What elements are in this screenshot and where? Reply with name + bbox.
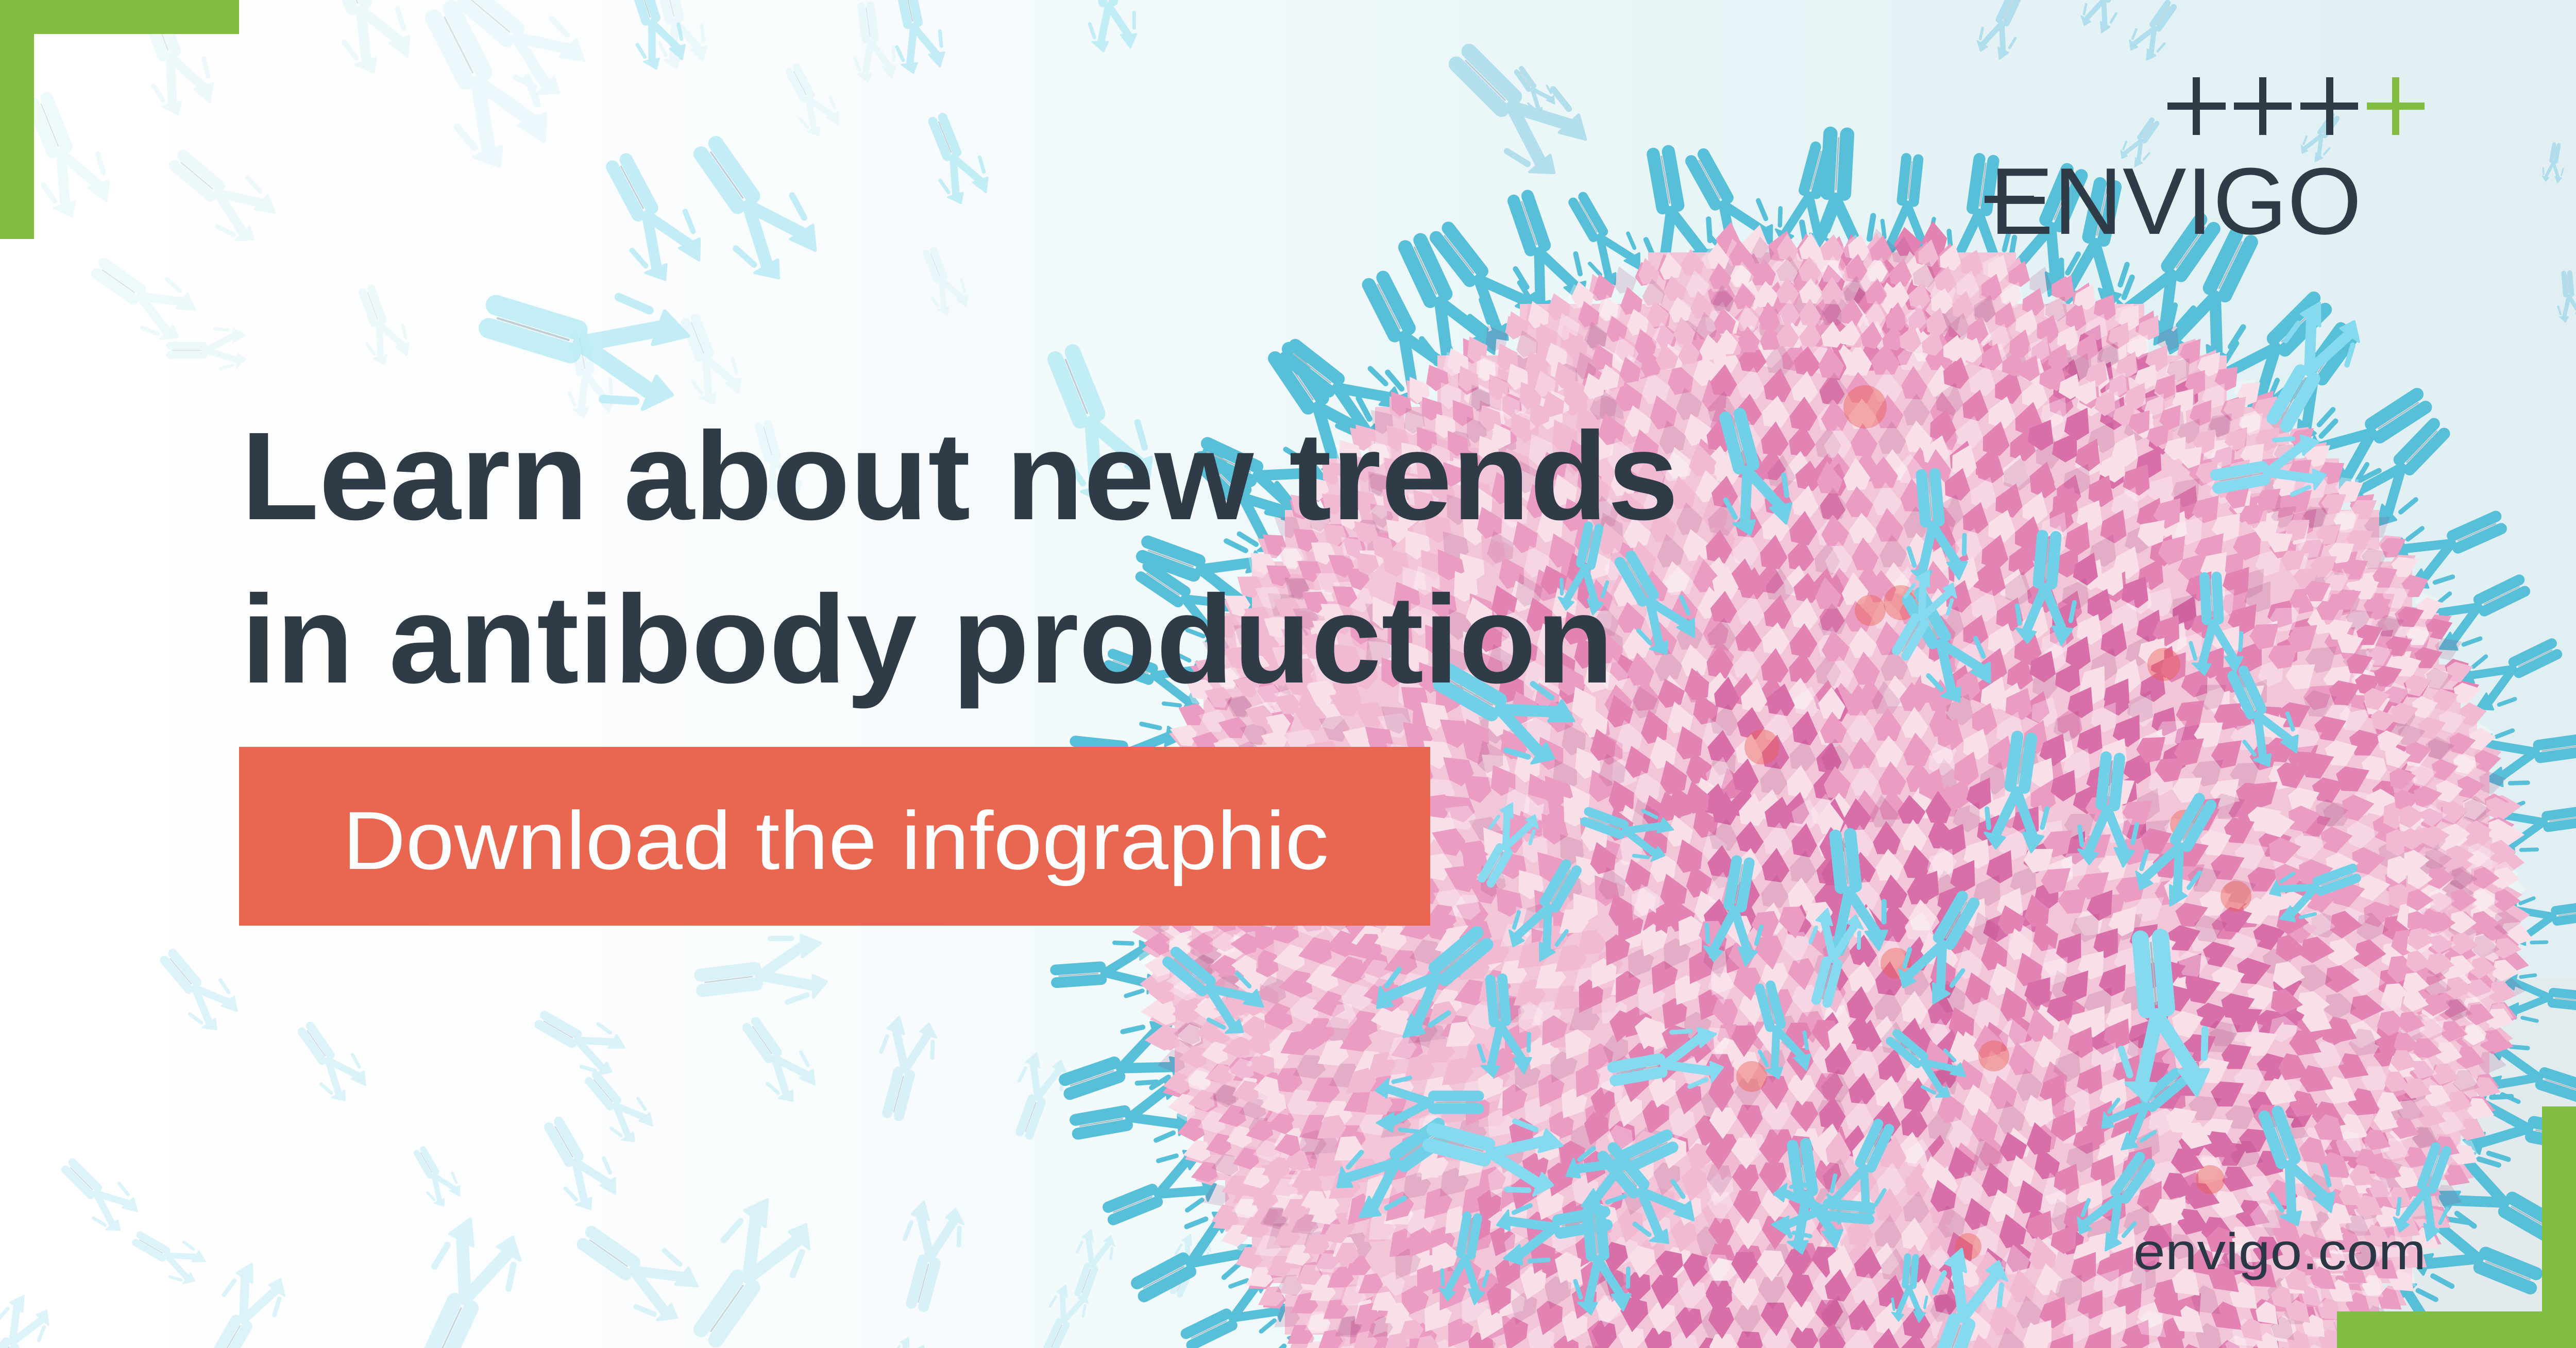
- logo: Envigo: [1985, 77, 2425, 242]
- title: [241, 412, 1679, 709]
- title: in antibody production: [241, 570, 1614, 709]
- call-to-action button: [239, 747, 1430, 926]
- background antibodies, lower left: [0, 932, 1214, 1348]
- cell rim shards: [1141, 231, 2523, 1348]
- background antibodies, right of logo area: [1438, 0, 2576, 322]
- call-to-action button: Download the infographic: [343, 794, 1329, 886]
- website address: envigo.com: [2133, 1223, 2426, 1281]
- corner bracket: bottom right: [2337, 1106, 2576, 1348]
- cell body base: [1165, 252, 2500, 1348]
- red spots on the cell surface: [1736, 385, 2251, 1260]
- antibodies around the cell rim: [1052, 132, 2576, 1348]
- faint background antibodies, left: [14, 0, 972, 503]
- pale background antibodies, bright group top: [479, 0, 1161, 509]
